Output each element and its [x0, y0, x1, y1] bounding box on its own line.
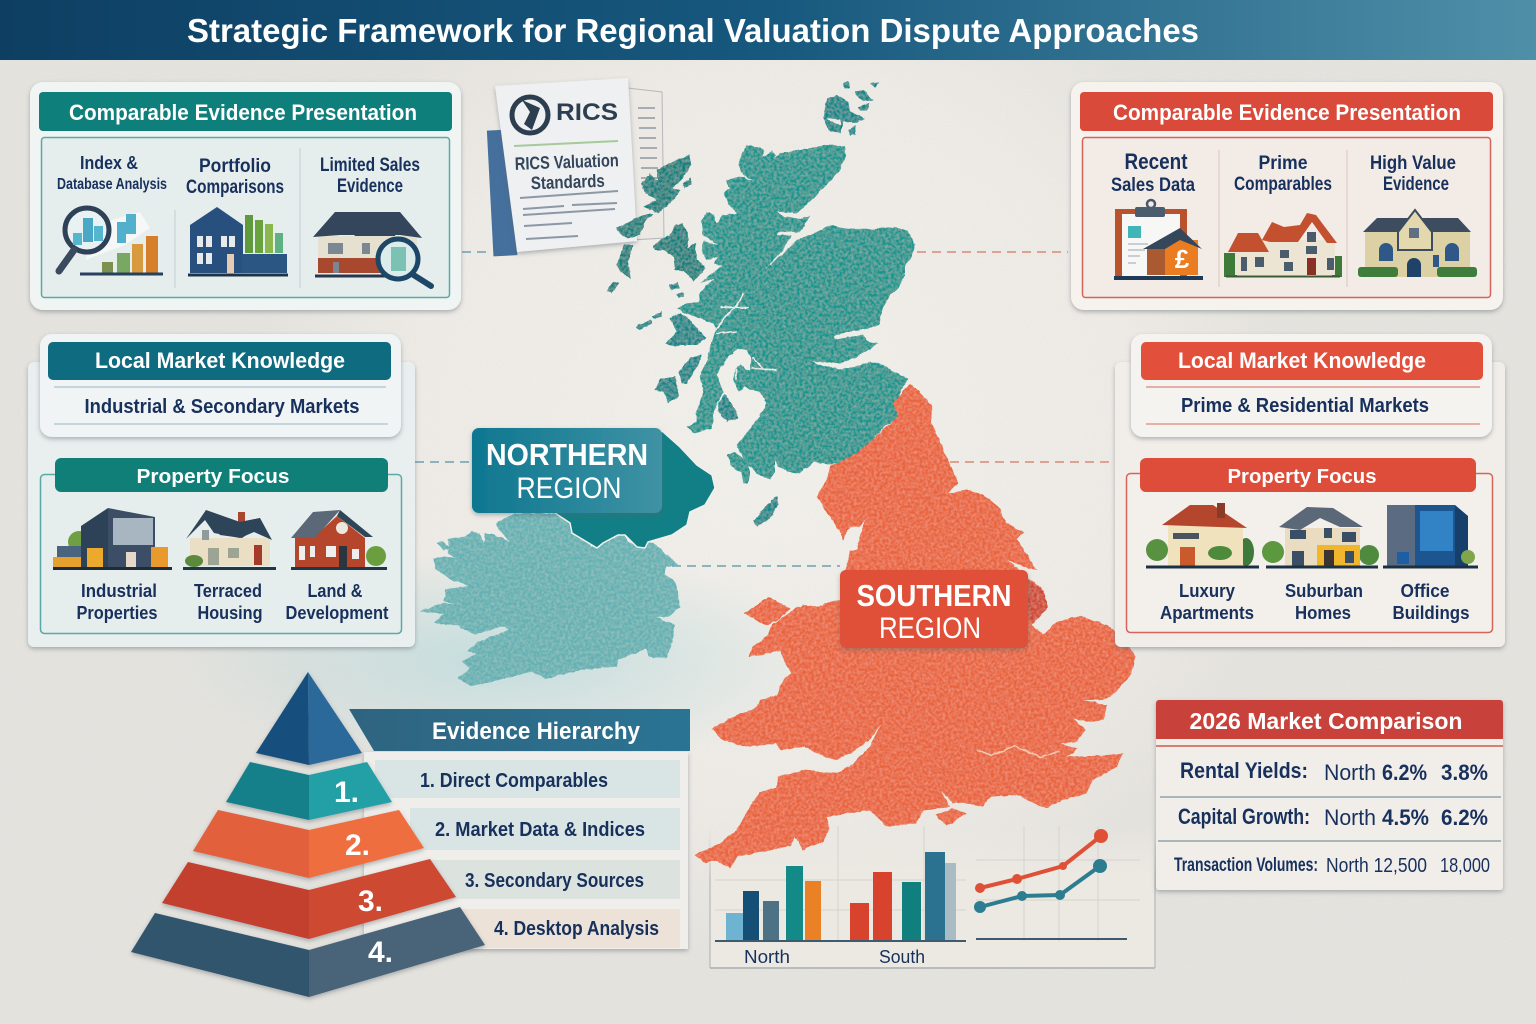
- panel: comparable evidence south: Prime: [1258, 153, 1308, 174]
- icon: office building: [1383, 505, 1478, 567]
- panel: south local market knowledge: Prime & Residential Markets: [1181, 395, 1429, 417]
- evidence hierarchy panel: 1. Direct Comparables: [420, 770, 608, 792]
- panel: 2026 market comparison: 6.2%: [1441, 805, 1488, 830]
- panel: 2026 market comparison: North 12,500: [1326, 855, 1427, 877]
- panel: 2026 market comparison: Rental Yields:: [1180, 758, 1308, 783]
- panel: south property focus: Buildings: [1392, 603, 1470, 623]
- panel: 2026 market comparison: Capital Growth:: [1178, 804, 1310, 829]
- panel: comparable evidence south: [1071, 82, 1503, 310]
- panel: north property focus: Development: [286, 603, 389, 623]
- icon: clipboard with house: [1114, 200, 1203, 278]
- panel: 2026 market comparison: 4.5%: [1382, 805, 1429, 830]
- panel: south local market knowledge: Local Market Knowledge: [1178, 348, 1426, 373]
- panel: comparable evidence north: Comparisons: [186, 177, 284, 198]
- RICS valuation standards document: RICS: [556, 99, 618, 126]
- panel: south property focus: Homes: [1295, 603, 1351, 623]
- evidence hierarchy panel: Evidence Hierarchy: [432, 718, 641, 745]
- title bar: Strategic Framework for Regional Valuation Dispute Approaches: [187, 12, 1199, 49]
- callout: northern region: REGION: [516, 472, 622, 505]
- panel: south local market knowledge: [1131, 334, 1492, 437]
- panel: comparable evidence north: [30, 82, 461, 310]
- connector lines: [415, 252, 1112, 566]
- map: Northern Ireland: [555, 431, 715, 548]
- callout: northern region: [472, 428, 662, 513]
- icon: land and development house: [291, 510, 387, 568]
- icon: portfolio building: [188, 207, 288, 275]
- map: Scotland: [607, 81, 915, 527]
- panel: 2026 market comparison: 2026 Market Comparison: [1190, 708, 1462, 734]
- panel: south property focus: [1115, 334, 1505, 647]
- bar and line chart panel: [710, 826, 1155, 968]
- icon: terraced house: [183, 510, 276, 568]
- panel: comparable evidence south: Recent: [1124, 149, 1188, 174]
- bar and line chart panel: North: [744, 947, 790, 967]
- pyramid tier 3: [162, 859, 456, 939]
- panel: comparable evidence north: Limited Sales: [320, 155, 420, 176]
- panel: south property focus: Apartments: [1160, 603, 1254, 623]
- pyramid tier 3: 3.: [358, 885, 383, 918]
- panel: north local market knowledge: Industrial & Secondary Markets: [84, 396, 360, 418]
- panel: south property focus: Luxury: [1179, 581, 1235, 601]
- panel: comparable evidence north: Portfolio: [199, 156, 271, 177]
- pyramid tier 2: [193, 810, 424, 878]
- panel: south property focus: Property Focus: [1228, 466, 1376, 488]
- pyramid tier 2: 2.: [345, 829, 370, 862]
- panel: north property focus: Properties: [76, 603, 158, 623]
- evidence hierarchy panel: [349, 709, 690, 949]
- panel: comparable evidence south: Evidence: [1383, 174, 1449, 195]
- icon: high value house: [1358, 210, 1477, 277]
- icon: RICS crest: [512, 97, 548, 133]
- panel: 2026 market comparison: [1156, 700, 1503, 890]
- panel: north property focus: Housing: [198, 603, 262, 623]
- RICS valuation standards document: [487, 78, 664, 256]
- panel: south property focus: Suburban: [1285, 581, 1363, 601]
- panel: 2026 market comparison: 6.2%: [1382, 760, 1427, 785]
- callout: southern region: SOUTHERN: [856, 578, 1012, 613]
- RICS valuation standards document: Standards: [530, 171, 605, 193]
- icon: industrial building: [53, 508, 172, 568]
- bar and line chart panel: South: [879, 947, 925, 967]
- panel: comparable evidence north: Comparable Evidence Presentation: [69, 100, 417, 125]
- callout: southern region: REGION: [879, 612, 981, 645]
- panel: 2026 market comparison: North: [1324, 760, 1376, 785]
- icon: database analysis chart: [59, 208, 163, 274]
- icon: luxury apartment house: [1146, 503, 1259, 567]
- panel: north local market knowledge: Local Market Knowledge: [95, 348, 345, 373]
- pyramid tier 1: 1.: [334, 776, 359, 809]
- panel: comparable evidence south: Comparables: [1234, 174, 1332, 195]
- evidence hierarchy panel: 3. Secondary Sources: [465, 870, 644, 892]
- panel: north property focus: [28, 334, 415, 647]
- pyramid tier 1: [226, 762, 392, 820]
- panel: north local market knowledge: [40, 334, 401, 437]
- evidence hierarchy panel: 2. Market Data & Indices: [435, 819, 645, 841]
- panel: comparable evidence south: High Value: [1370, 153, 1456, 174]
- panel: 2026 market comparison: 18,000: [1440, 855, 1490, 877]
- panel: north property focus: Property Focus: [136, 466, 290, 488]
- panel: comparable evidence south: Comparable Evidence Presentation: [1113, 100, 1461, 125]
- panel: north property focus: Terraced: [194, 581, 262, 601]
- icon: suburban home: [1262, 507, 1379, 567]
- callout: southern region: [840, 570, 1028, 648]
- map: Ireland: [420, 513, 680, 686]
- panel: comparable evidence north: Evidence: [337, 176, 403, 197]
- panel: north property focus: Industrial: [81, 581, 157, 601]
- panel: north property focus: Land &: [308, 581, 362, 601]
- pyramid apex: [256, 672, 362, 765]
- icon: prime comparable house: [1224, 213, 1342, 277]
- icon: clipboard with house: £: [1175, 244, 1190, 274]
- panel: 2026 market comparison: North: [1324, 805, 1376, 830]
- panel: comparable evidence south: Sales Data: [1111, 175, 1195, 196]
- icon: house with magnifier: [313, 212, 431, 286]
- panel: south property focus: Office: [1400, 581, 1450, 601]
- panel: comparable evidence north: Index &: [80, 153, 138, 173]
- panel: comparable evidence north: Database Analysis: [57, 176, 167, 193]
- panel: 2026 market comparison: 3.8%: [1441, 760, 1488, 785]
- map: England and Wales: [695, 383, 1135, 868]
- pyramid tier 4: [131, 907, 485, 997]
- panel: 2026 market comparison: Transaction Volumes:: [1174, 855, 1318, 876]
- evidence pyramid: [131, 672, 485, 997]
- callout: northern region: NORTHERN: [486, 437, 648, 472]
- evidence hierarchy panel: 4. Desktop Analysis: [494, 918, 659, 940]
- RICS valuation standards document: RICS Valuation: [514, 150, 619, 174]
- title bar: [0, 0, 1536, 60]
- pyramid tier 4: 4.: [368, 936, 393, 969]
